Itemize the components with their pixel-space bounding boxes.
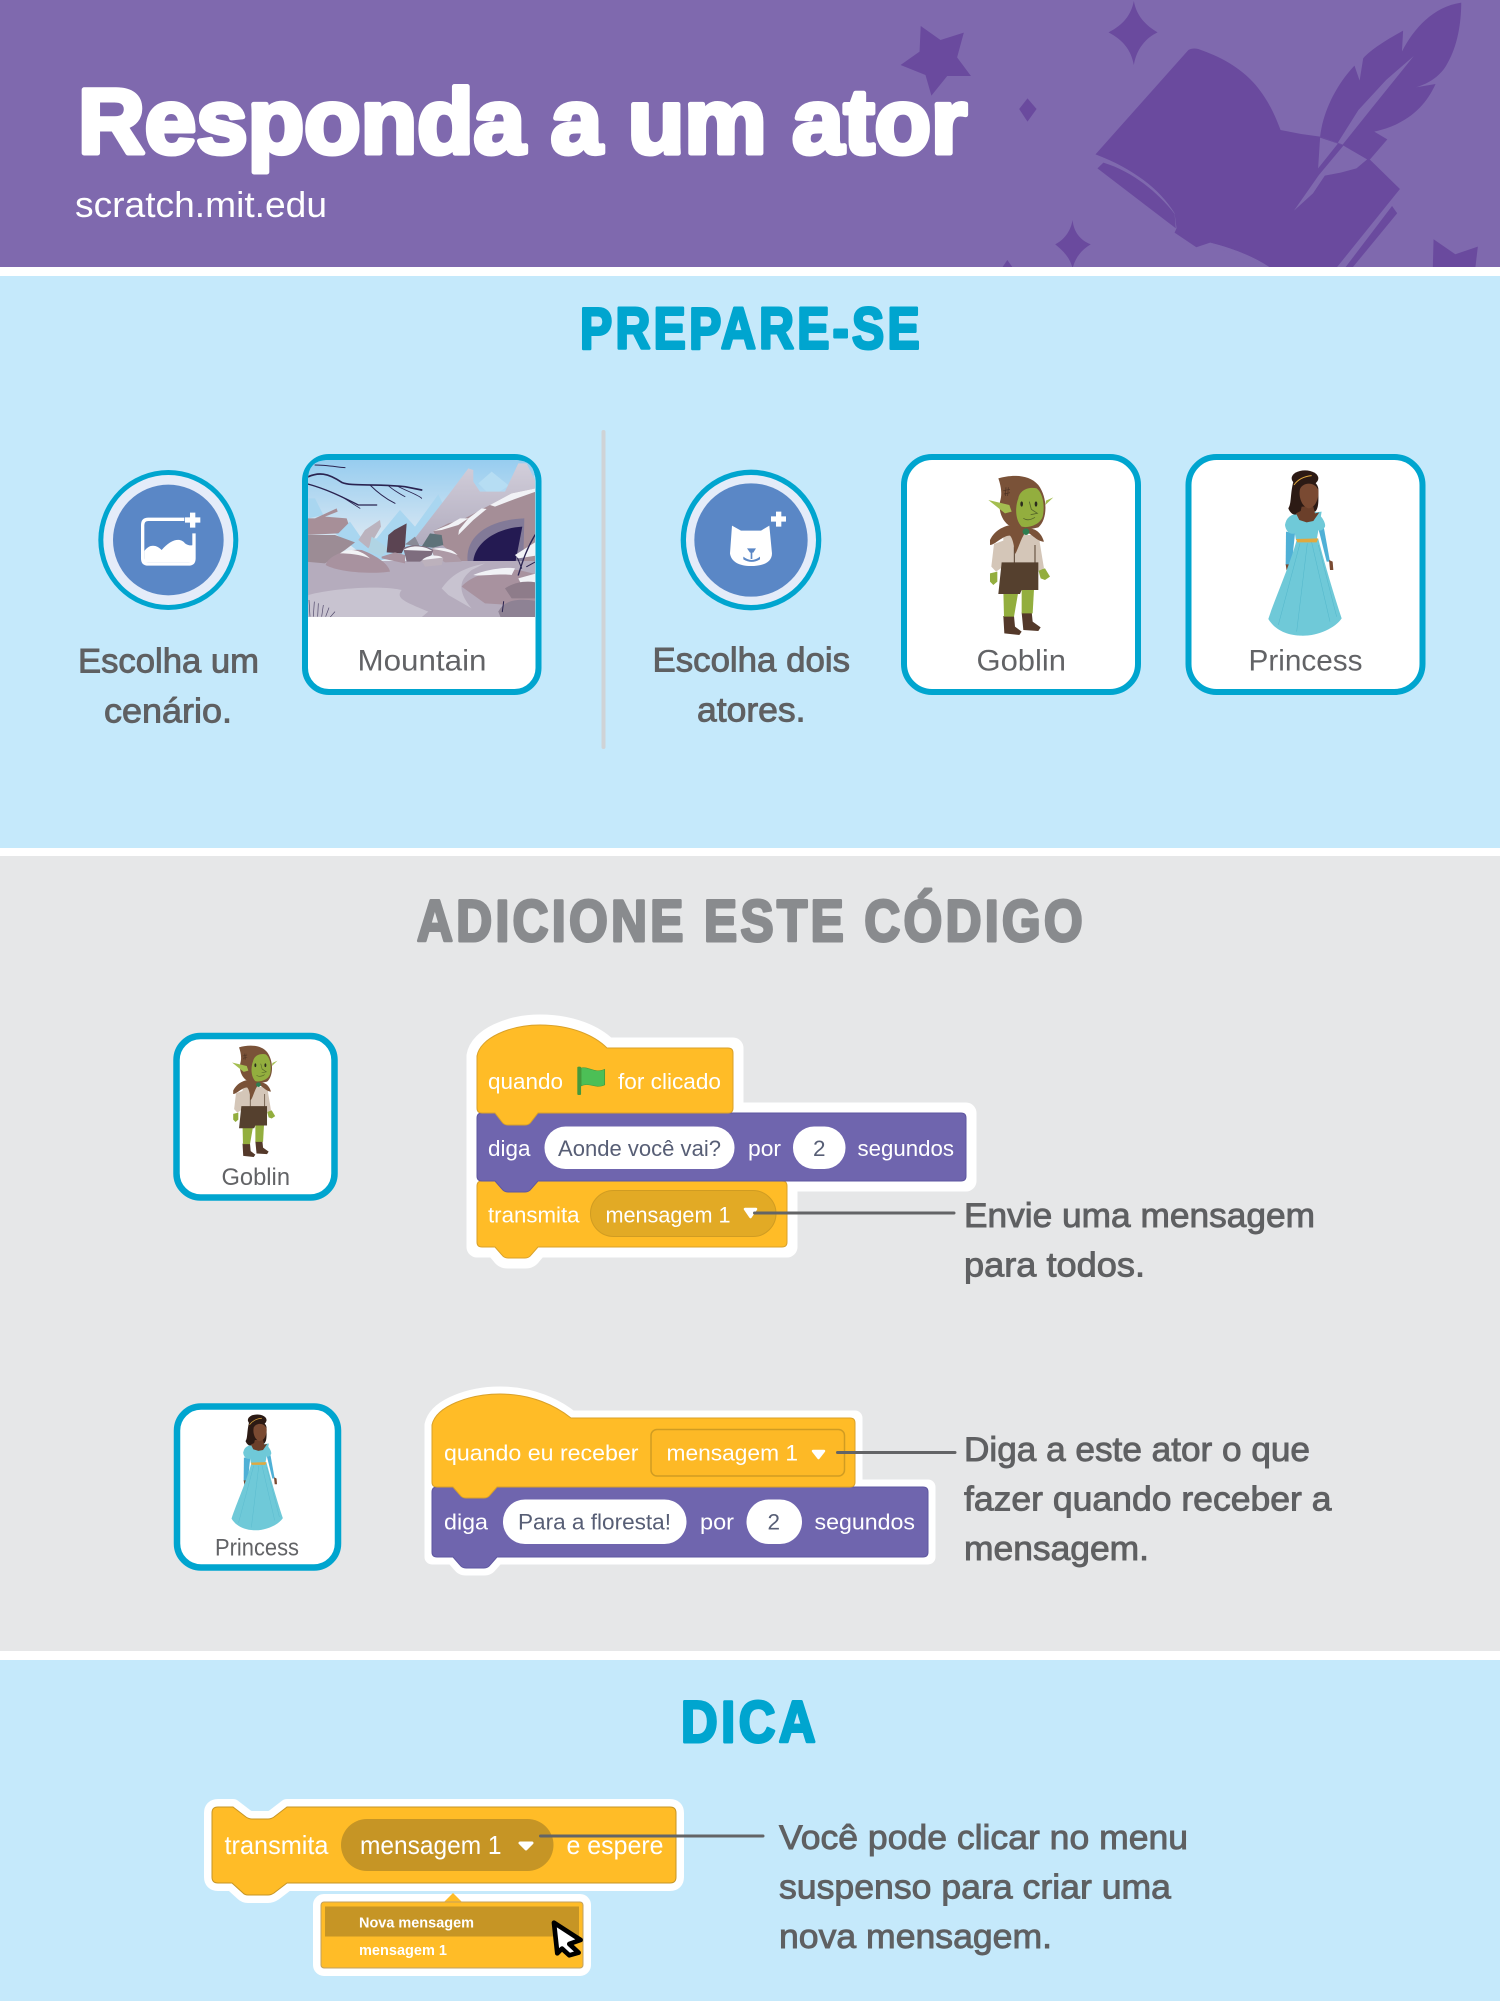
icon: mouse cursor <box>554 1923 581 1955</box>
dropdown menu: Nova mensagem <box>359 1916 474 1932</box>
header art: book, quill and stars <box>901 1 1478 270</box>
instruction: choose two sprites: Escolha dois <box>652 642 850 680</box>
card: small princess <box>177 1406 338 1568</box>
callout: diga a este ator <box>964 1431 1332 1568</box>
instruction: choose backdrop <box>78 642 259 730</box>
callout: diga a este ator: fazer quando receber a <box>964 1480 1332 1518</box>
instruction: choose two sprites <box>652 642 850 730</box>
instruction: choose backdrop: Escolha um <box>78 642 259 680</box>
illustration: princess <box>1268 470 1342 636</box>
code stack: princess <box>432 1394 928 1568</box>
panel: adicione este codigo <box>0 856 1500 1651</box>
panel: header banner <box>0 0 1500 270</box>
block: diga para a floresta: 2 <box>768 1510 780 1534</box>
block: diga para a floresta: Para a floresta! <box>518 1510 671 1534</box>
callout: envie uma mensagem: Envie uma mensagem <box>964 1197 1315 1235</box>
card: princess sprite <box>1188 457 1422 692</box>
block: transmita e espere <box>212 1807 676 1895</box>
callout: voce pode clicar <box>779 1819 1188 1956</box>
block: quando bandeira clicada <box>477 1025 733 1125</box>
block: diga para a floresta: por <box>700 1510 735 1534</box>
block: diga para a floresta: segundos <box>814 1510 915 1534</box>
block: diga para a floresta <box>432 1487 928 1568</box>
block: quando eu receber <box>432 1394 855 1498</box>
block: diga: segundos <box>858 1136 954 1161</box>
callout: voce pode clicar: Você pode clicar no menu <box>779 1819 1188 1857</box>
block: transmita: mensagem 1 <box>606 1202 730 1228</box>
instruction: choose two sprites: atores. <box>697 692 806 730</box>
block: transmita: transmita <box>488 1202 580 1228</box>
callout: diga a este ator: Diga a este ator o que <box>964 1431 1310 1469</box>
block: transmita e espere: mensagem 1 <box>360 1832 502 1860</box>
label: mountain: Mountain <box>358 644 486 678</box>
heading: adicione este codigo: ADICIONE ESTE CÓDIGO <box>417 889 1086 954</box>
tip block and menu <box>212 1807 676 1968</box>
illustration: goblin <box>988 476 1053 635</box>
icon: choose backdrop <box>98 470 238 610</box>
card: small goblin: Goblin <box>222 1164 290 1191</box>
subtitle url: scratch.mit.edu <box>75 184 327 225</box>
icon: choose sprite <box>681 470 821 610</box>
code stack: goblin <box>477 1025 966 1258</box>
leader line: receive <box>838 1451 955 1454</box>
title: Responda a um ator <box>78 71 967 173</box>
block: transmita e espere: e espere <box>566 1832 664 1860</box>
block: quando bandeira clicada: for clicado <box>618 1069 721 1094</box>
block: diga: 2 <box>813 1136 826 1161</box>
callout: voce pode clicar: nova mensagem. <box>779 1918 1052 1956</box>
block: quando eu receber: mensagem 1 <box>666 1440 798 1466</box>
panel: prepare-se <box>0 276 1500 848</box>
leader line: broadcast <box>754 1212 954 1214</box>
card: goblin sprite <box>904 457 1138 692</box>
dropdown menu <box>321 1893 583 1968</box>
label: princess: Princess <box>1248 644 1362 678</box>
callout: diga a este ator: mensagem. <box>964 1530 1149 1568</box>
card: small princess: Princess <box>215 1534 299 1562</box>
instruction: choose backdrop: cenário. <box>104 692 232 730</box>
panel: dica <box>0 1660 1500 2001</box>
heading: prepare-se: PREPARE-SE <box>580 296 923 362</box>
block: diga <box>477 1113 966 1192</box>
callout: voce pode clicar: suspenso para criar uma <box>779 1868 1171 1906</box>
block: diga: Aonde você vai? <box>558 1136 721 1161</box>
block: quando eu receber: quando eu receber <box>444 1440 639 1466</box>
block: diga: diga <box>488 1136 531 1161</box>
block: quando bandeira clicada: quando <box>488 1069 563 1094</box>
card: small goblin <box>176 1036 334 1198</box>
label: goblin: Goblin <box>976 644 1066 678</box>
icon: green flag <box>577 1067 605 1095</box>
callout: envie uma mensagem: para todos. <box>964 1246 1145 1284</box>
callout: envie uma mensagem <box>964 1197 1315 1284</box>
block: diga para a floresta: diga <box>444 1510 488 1534</box>
card: mountain backdrop <box>305 455 540 692</box>
block: transmita e espere: transmita <box>224 1832 329 1860</box>
block: diga: por <box>748 1136 782 1161</box>
dropdown menu: mensagem 1 <box>359 1943 447 1959</box>
leader line: menu <box>540 1834 763 1838</box>
heading: dica: DICA <box>681 1690 819 1755</box>
illustration: snowy mountain <box>305 455 540 620</box>
block: transmita <box>477 1181 787 1258</box>
vertical divider <box>602 430 606 749</box>
